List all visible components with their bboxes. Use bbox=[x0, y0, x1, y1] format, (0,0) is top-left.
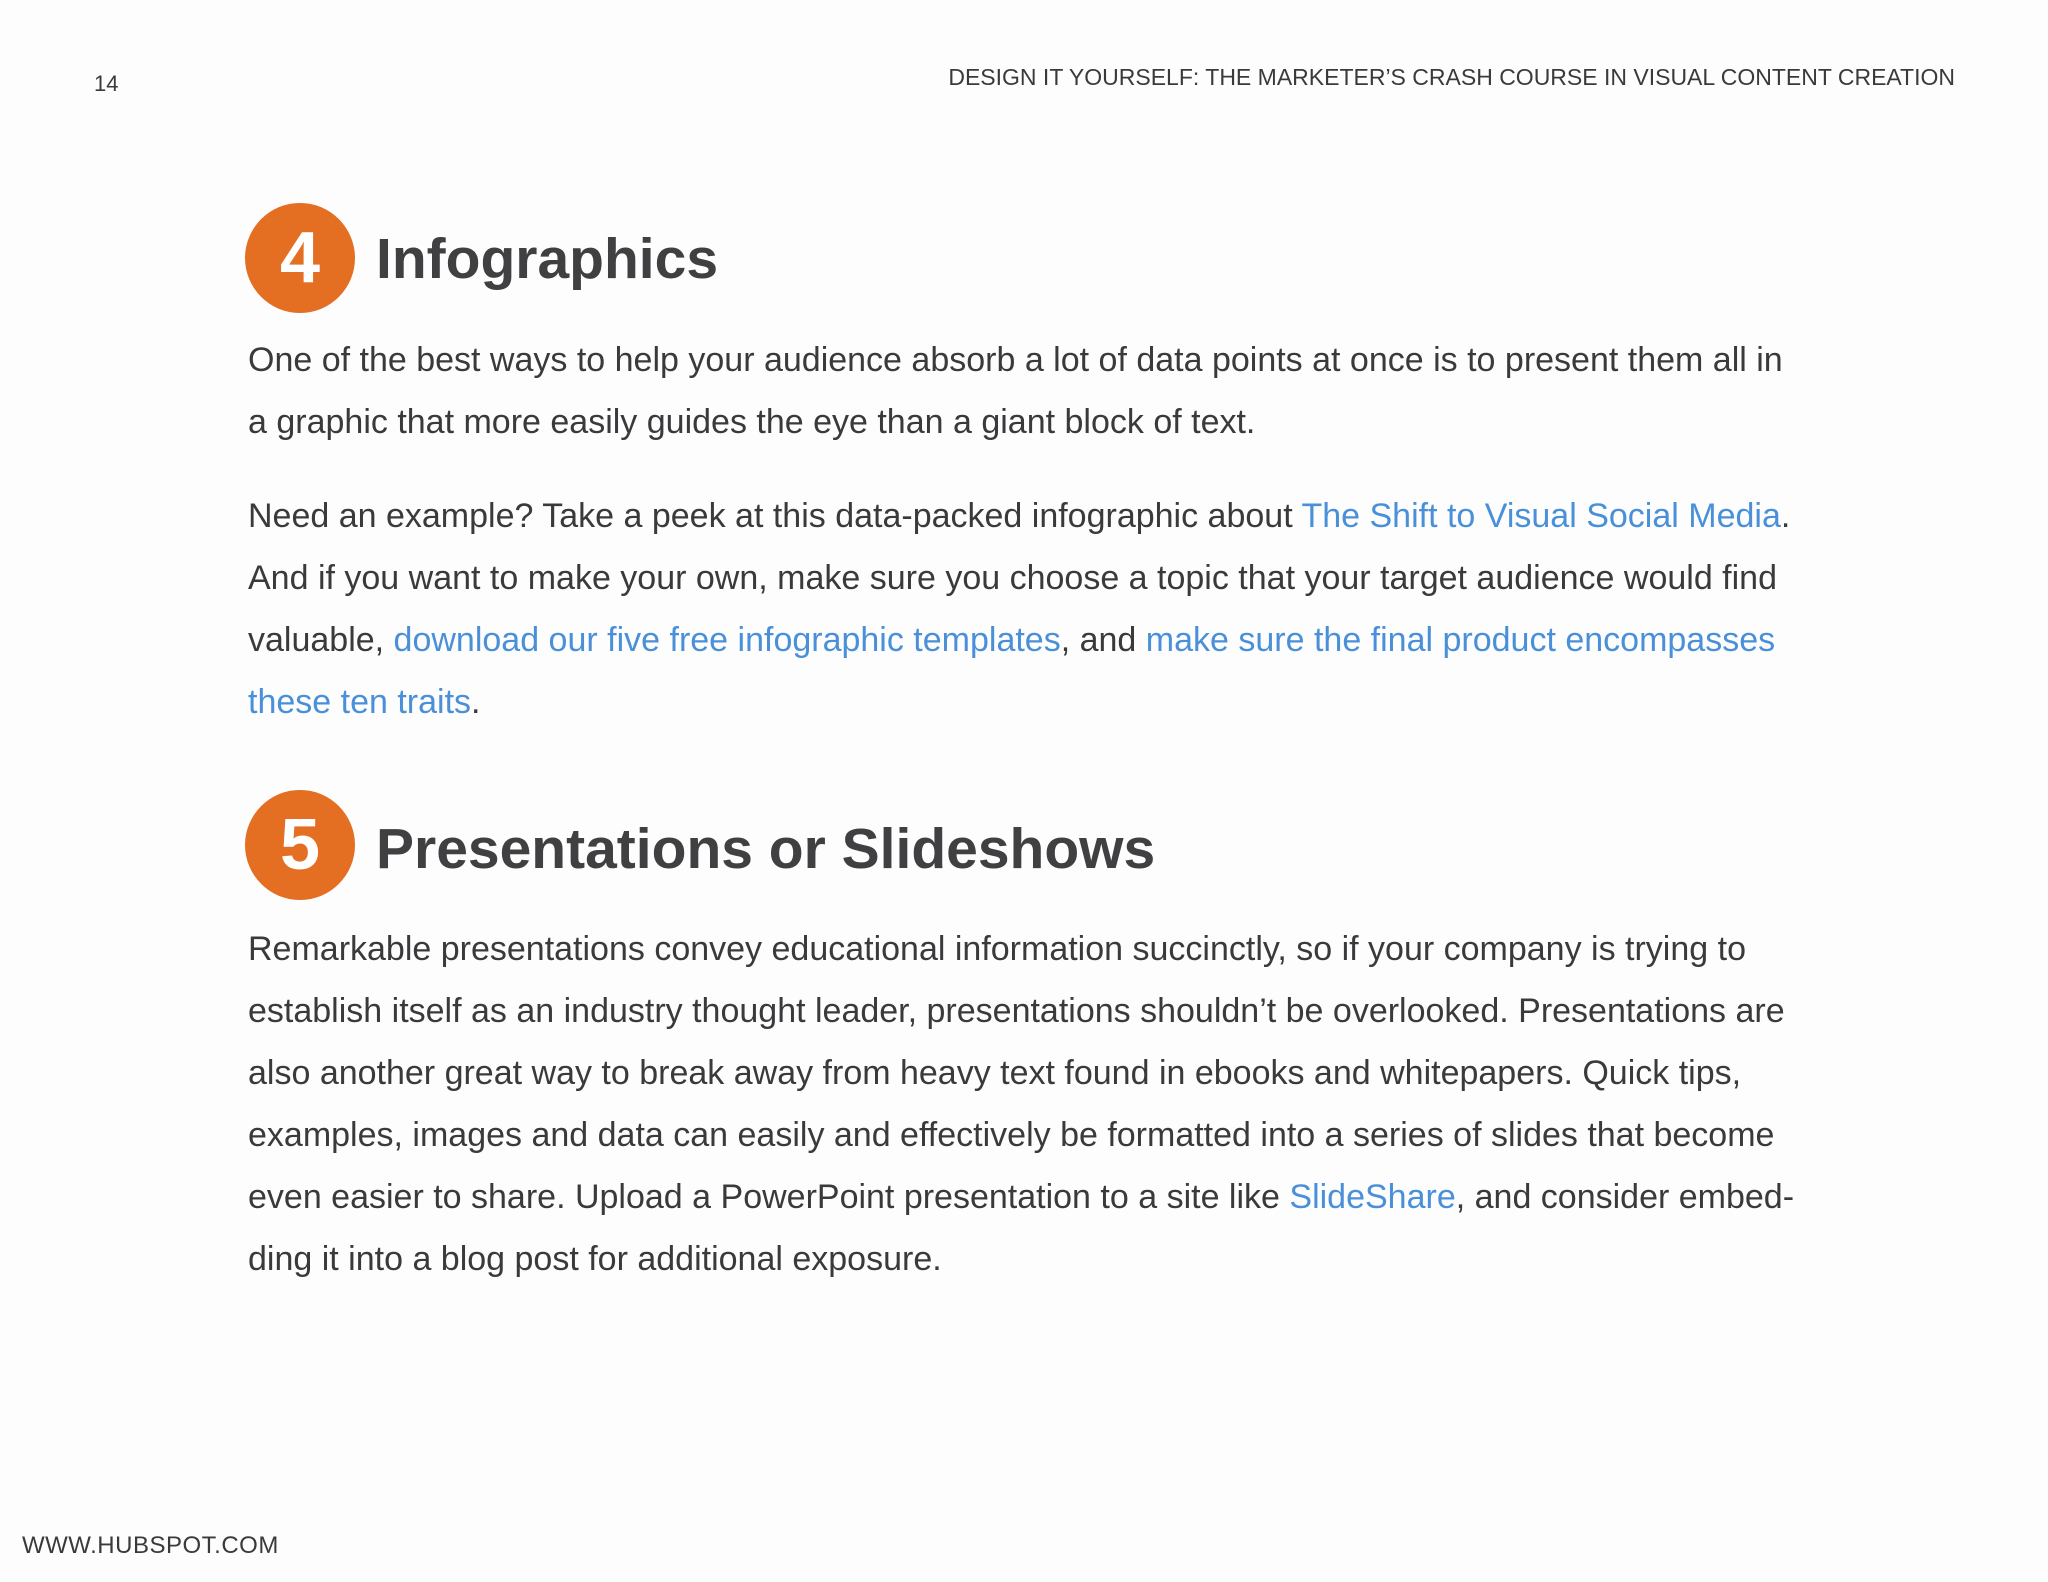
paragraph: infographics example with links bbox=[248, 497, 1790, 721]
paragraph: presentations: ding it into a blog post for additional exposure. bbox=[248, 1240, 942, 1278]
paragraph: infographics example with links: these ten traits. bbox=[248, 683, 480, 721]
badge 4 bbox=[245, 203, 355, 313]
paragraph: presentations: also another great way to break away from heavy text found in ebooks and whitepapers. Quick tips, bbox=[248, 1054, 1741, 1092]
paragraph: infographics intro: a graphic that more easily guides the eye than a giant block of text. bbox=[248, 403, 1255, 441]
paragraph: presentations: Remarkable presentations convey educational information succinctly, so if your company is trying to bbox=[248, 930, 1746, 968]
footer url: WWW.HUBSPOT.COM bbox=[22, 1532, 279, 1559]
paragraph: infographics example with links: And if you want to make your own, make sure you choose a topic that your target audience would find bbox=[248, 559, 1777, 597]
paragraph: infographics intro: One of the best ways to help your audience absorb a lot of data points at once is to present them all in bbox=[248, 341, 1783, 379]
badge 5 bbox=[245, 790, 355, 900]
paragraph: presentations: establish itself as an industry thought leader, presentations shouldn’t be overlooked. Presentations are bbox=[248, 992, 1785, 1030]
paragraph: infographics example with links: Need an example? Take a peek at this data-packed infographic about The Shift to Visual Social Media. bbox=[248, 497, 1790, 535]
page number: 14 bbox=[94, 71, 118, 96]
heading: Presentations or Slideshows: Presentations or Slideshows bbox=[376, 817, 1155, 881]
badge 4: 4 bbox=[280, 218, 320, 298]
heading: Infographics: Infographics bbox=[376, 227, 718, 291]
header title: DESIGN IT YOURSELF: THE MARKETER’S CRASH COURSE IN VISUAL CONTENT CREATION bbox=[948, 64, 1955, 90]
paragraph: presentations: even easier to share. Upload a PowerPoint presentation to a site like SlideShare, and consider embed- bbox=[248, 1178, 1794, 1216]
paragraph: presentations: examples, images and data can easily and effectively be formatted into a series of slides that become bbox=[248, 1116, 1774, 1154]
badge 5: 5 bbox=[280, 805, 320, 885]
paragraph: infographics example with links: valuable, download our five free infographic templates, and make sure the final product encompasses bbox=[248, 621, 1775, 659]
paragraph: presentations bbox=[248, 930, 1794, 1278]
paragraph: infographics intro bbox=[248, 341, 1783, 441]
